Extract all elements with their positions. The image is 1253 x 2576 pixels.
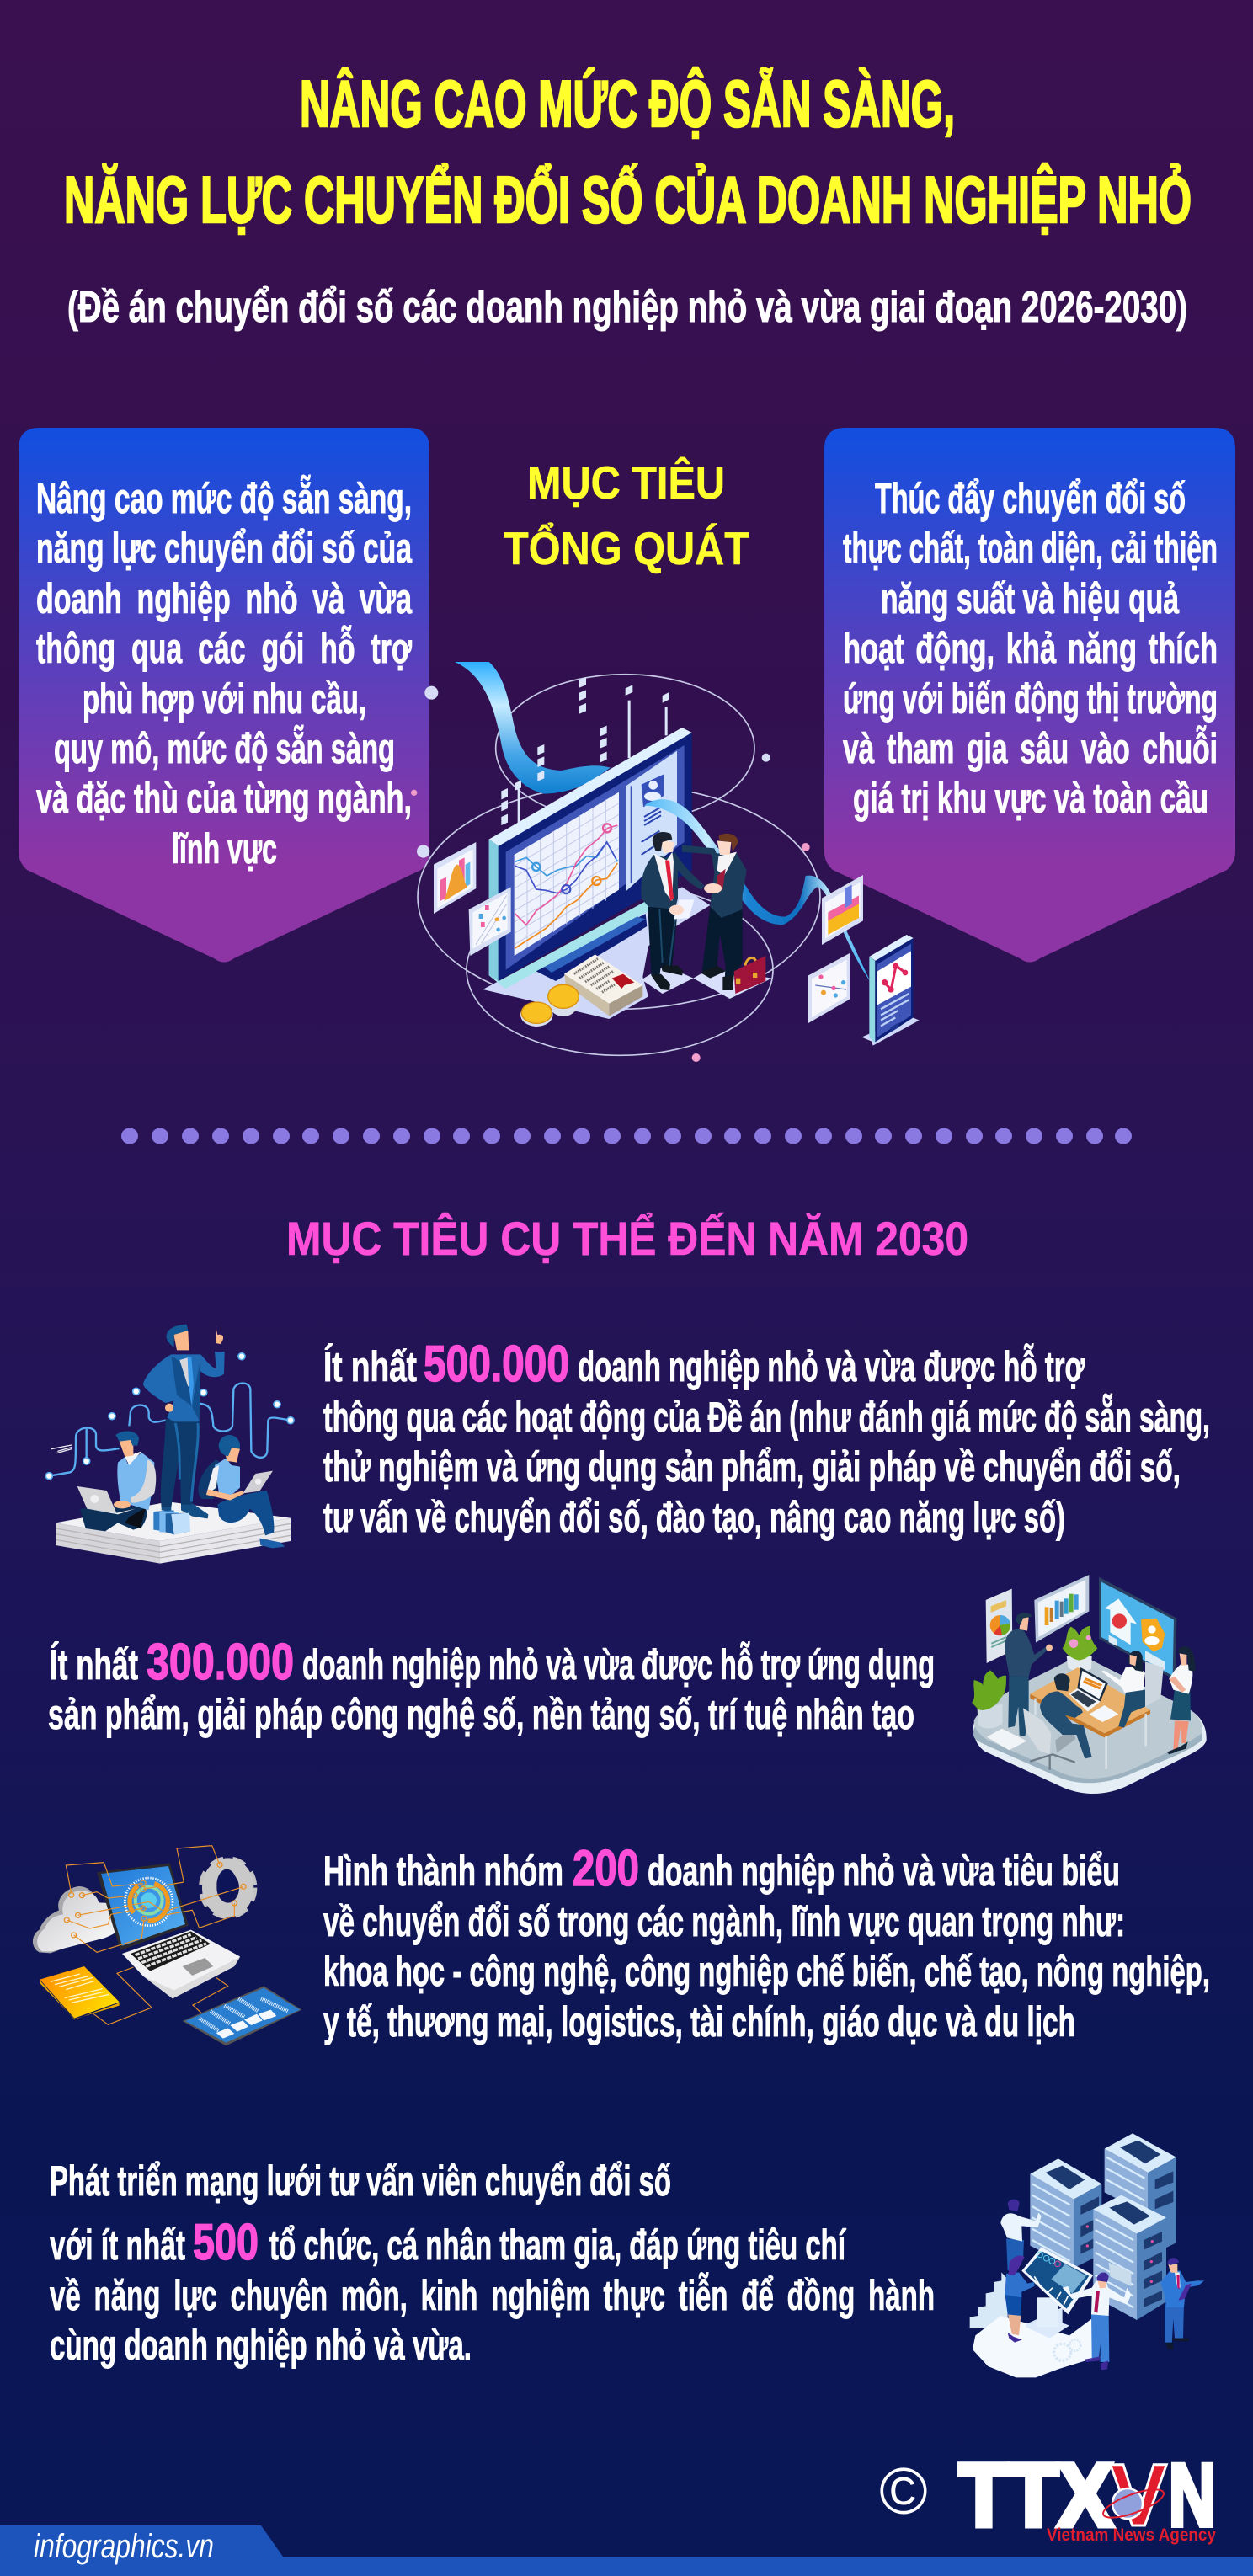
server tower left bbox=[1030, 2158, 1101, 2268]
logo: TTXVN: Vietnam News Agency bbox=[1047, 2525, 1216, 2545]
panel: left objective: quy mô, mức độ sẵn sàng bbox=[54, 724, 395, 772]
illustration: team with laptops on platform bbox=[45, 1325, 294, 1564]
person at server bbox=[1000, 2200, 1042, 2271]
gear bbox=[202, 1859, 253, 1916]
floating dots bbox=[411, 686, 810, 1062]
orange document bbox=[40, 1966, 120, 2019]
number: 300.000: 300.000 bbox=[147, 1634, 294, 1690]
standing woman bbox=[1167, 1646, 1196, 1754]
logo: TTXVN: N bbox=[1169, 2446, 1216, 2545]
panel: left objective: doanh nghiệp nhỏ và vừa bbox=[36, 575, 413, 622]
seated woman bbox=[1101, 1651, 1164, 1728]
illustration: smartphone bbox=[861, 935, 920, 1046]
server tower front bbox=[1086, 2195, 1166, 2320]
translucent panel bbox=[1109, 2263, 1131, 2286]
copyright mark: © bbox=[879, 2454, 928, 2528]
heading: specific targets: MỤC TIÊU CỤ THỂ ĐẾN NĂM 2030 bbox=[286, 1212, 968, 1265]
man in tie bbox=[1063, 2273, 1131, 2370]
floor sheet bbox=[987, 1729, 1026, 1750]
radar on screen bbox=[125, 1878, 173, 1926]
white floor with stairs bbox=[970, 2272, 1095, 2377]
text block: consultant network: cùng doanh nghiệp nhỏ và vừa. bbox=[50, 2322, 472, 2369]
side cards bbox=[434, 842, 863, 1023]
illustration: servers and consultants bbox=[970, 2133, 1204, 2377]
text block: target 300.000 bbox=[48, 1634, 935, 1738]
text block: consultant network: Phát triển mạng lưới tư vấn viên chuyển đổi số bbox=[50, 2157, 671, 2205]
illustration: laptop, cloud, gear and devices bbox=[33, 1846, 301, 2045]
circuit wires bbox=[66, 1846, 243, 2024]
stacked boxes bbox=[153, 1510, 190, 1534]
text block: target 500.000 bbox=[323, 1336, 1210, 1541]
laptop bbox=[97, 1863, 240, 1998]
source url: infographics.vn bbox=[34, 2528, 214, 2565]
panel: left objective bbox=[19, 428, 429, 962]
monitor bbox=[489, 728, 692, 989]
panel: right objective bbox=[824, 428, 1235, 962]
illustration: business meeting with dashboard bbox=[411, 662, 871, 1062]
heading: general objective bbox=[504, 456, 749, 574]
man with clipboard bbox=[1160, 2258, 1204, 2350]
footer bar bbox=[0, 2525, 1253, 2576]
text block: target 300.000: doanh nghiệp nhỏ và vừa được hỗ trợ ứng dụng bbox=[302, 1641, 935, 1688]
number: 200: 200 bbox=[573, 1840, 639, 1896]
heading: general objective: TỔNG QUÁT bbox=[504, 522, 749, 574]
woman sitting with laptop bbox=[198, 1435, 285, 1548]
panel: left objective: phù hợp với nhu cầu, bbox=[83, 675, 366, 723]
man sitting with laptop bbox=[77, 1431, 156, 1531]
smartphone bbox=[183, 1986, 301, 2045]
briefcase bbox=[734, 956, 765, 994]
text block: consultant network bbox=[50, 2157, 935, 2369]
divider dots bbox=[121, 1128, 1132, 1144]
gold coins bbox=[520, 984, 579, 1027]
plants bbox=[972, 1626, 1097, 1728]
cloud bbox=[33, 1886, 122, 1953]
poster with pie chart bbox=[986, 1589, 1012, 1663]
standing man bbox=[1005, 1613, 1053, 1736]
text block: consultant network: với ít nhất bbox=[50, 2221, 185, 2269]
wall screen bbox=[1099, 1577, 1176, 1680]
heading: general objective: MỤC TIÊU bbox=[527, 456, 725, 509]
woman at table bbox=[1005, 2256, 1034, 2343]
desk bbox=[1030, 1667, 1150, 1769]
standing man bbox=[143, 1325, 225, 1518]
number: 500.000: 500.000 bbox=[424, 1336, 569, 1392]
text block: consultant network: tổ chức, cá nhân tham gia, đáp ứng tiêu chí bbox=[269, 2221, 846, 2269]
server tower back bbox=[1105, 2133, 1176, 2257]
man right bbox=[682, 834, 747, 990]
seated man with chair bbox=[1023, 1673, 1092, 1770]
panel: left objective: lĩnh vực bbox=[172, 825, 277, 872]
chart panel bbox=[1034, 1575, 1089, 1643]
platform bbox=[56, 1501, 291, 1564]
data pixels bbox=[501, 677, 669, 846]
line chart on screen bbox=[515, 824, 617, 948]
touch table bbox=[1021, 2247, 1093, 2314]
ribbon lower bbox=[644, 799, 871, 983]
globe bbox=[1112, 2488, 1143, 2519]
illustration: office meeting bbox=[972, 1575, 1207, 1794]
stack of documents bbox=[564, 954, 642, 1016]
text block: target 200 bbox=[323, 1840, 1210, 2045]
man left bbox=[641, 832, 705, 990]
text block: target 300.000: Ít nhất bbox=[50, 1641, 138, 1688]
circuit lines bbox=[49, 1383, 291, 1476]
ribbon top bbox=[455, 662, 611, 794]
logo: TTXVN: V bbox=[1110, 2446, 1167, 2545]
panel: left objective: Nâng cao mức độ sẵn sàng, bbox=[36, 474, 412, 522]
circuit nodes bbox=[45, 1353, 294, 1480]
logo: TTXVN bbox=[959, 2446, 1216, 2545]
title bbox=[64, 67, 1192, 237]
floor platform bbox=[973, 1655, 1207, 1794]
orbit rings bbox=[418, 675, 820, 1055]
panel: left objective: năng lực chuyển đổi số của bbox=[36, 525, 413, 572]
text block: target 200: Hình thành nhóm bbox=[323, 1848, 563, 1895]
text block: target 500.000: Ít nhất bbox=[323, 1343, 417, 1390]
number: 500: 500 bbox=[193, 2214, 259, 2270]
panel: left objective: thông qua các gói hỗ trợ bbox=[36, 625, 412, 672]
floor bbox=[483, 887, 710, 1019]
panel: left objective: và đặc thù của từng ngành, bbox=[36, 775, 412, 822]
profile card bbox=[631, 774, 664, 883]
logo: TTXVN: TTX bbox=[959, 2446, 1112, 2545]
